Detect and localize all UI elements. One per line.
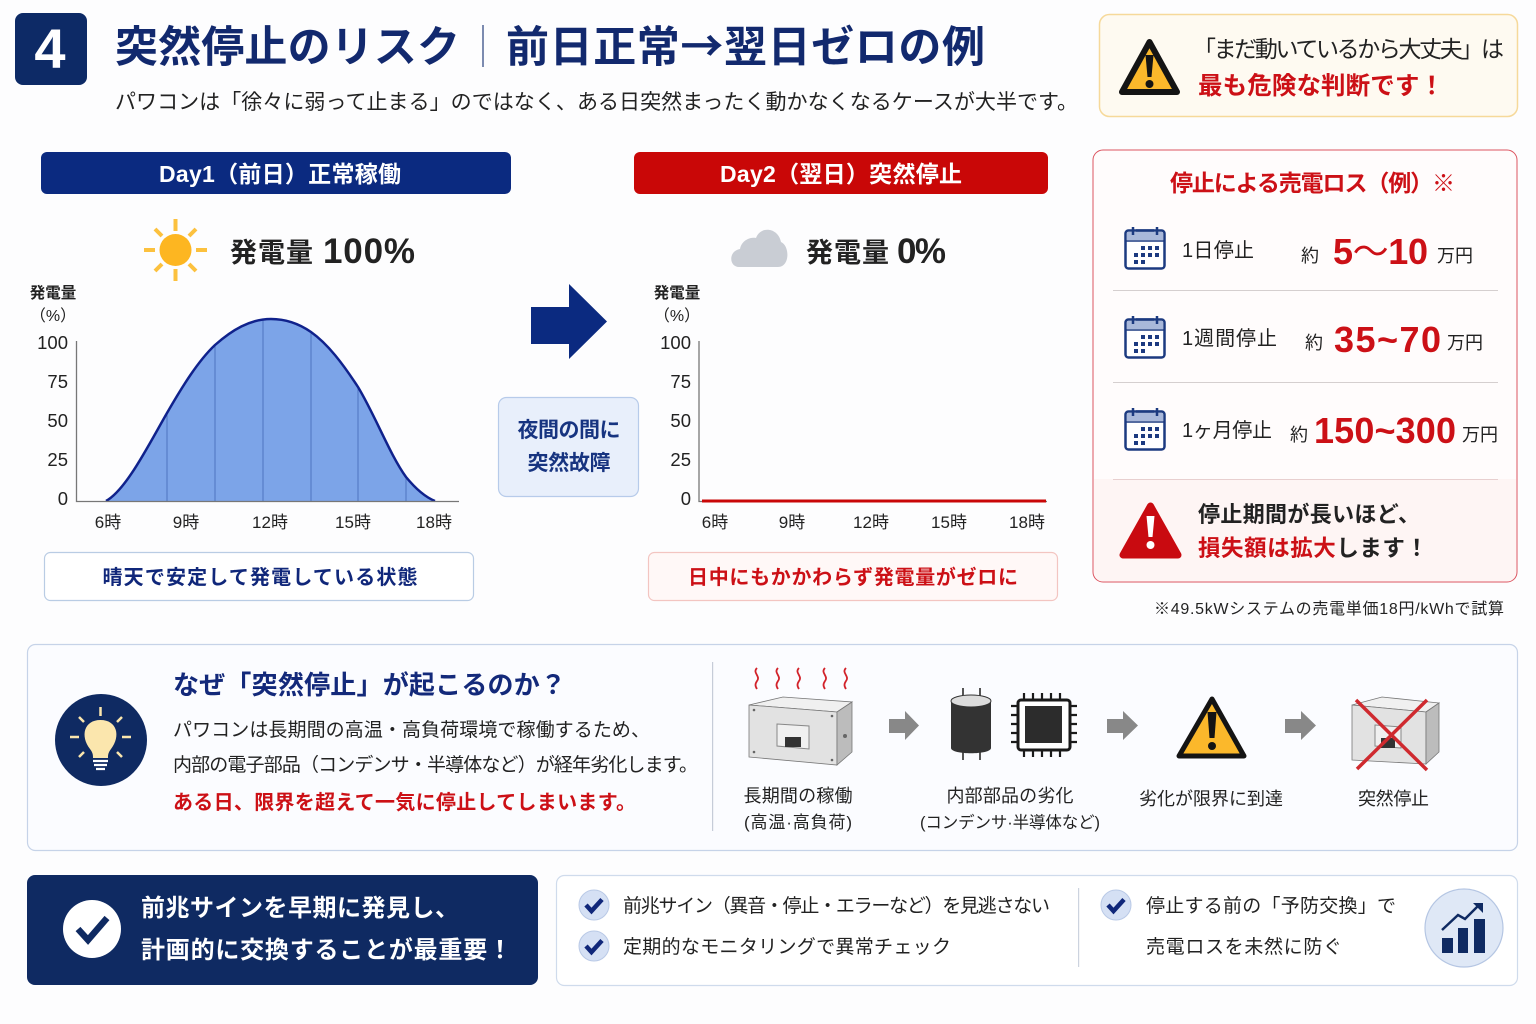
- loss row: 1 month: 万円: [1462, 425, 1498, 445]
- flow step: limit reached: 劣化が限界に到達: [1139, 789, 1283, 809]
- chart: day 1 generation curve: 75: [47, 371, 68, 392]
- callout: warning: 「まだ動いているから大丈夫」は: [1193, 36, 1504, 62]
- arrow: flow 3: [1285, 711, 1316, 740]
- chart: day 2 generation flat line: 100: [660, 332, 691, 353]
- caption: day 1: 晴天で安定して発電している状態: [102, 566, 418, 589]
- chart: day 2 generation flat line: 75: [670, 371, 691, 392]
- chart: day 2 generation flat line: 18時: [1009, 513, 1045, 532]
- chart: day 2 generation flat line: 12時: [853, 513, 889, 532]
- panel: key message: [27, 875, 538, 985]
- loss conclusion text: 停止期間が長いほど、: [1198, 502, 1420, 527]
- action item: preventive replacement: [1101, 890, 1396, 958]
- icon: warning triangle: [1122, 42, 1177, 92]
- flow step: long operation: [744, 668, 852, 832]
- icon: red warning triangle: [1123, 506, 1178, 555]
- chart: day 2 generation flat line: 6時: [702, 513, 728, 532]
- day 1 header: [41, 152, 511, 194]
- loss panel heading: 停止による売電ロス（例）※: [1170, 170, 1455, 196]
- chart: day 1 generation curve: 12時: [252, 513, 288, 532]
- caption: day 1: [44, 552, 474, 600]
- action item: preventive replacement: 売電ロスを未然に防ぐ: [1146, 936, 1342, 958]
- loss row: 1 week: 万円: [1447, 333, 1483, 353]
- chart: day 1 generation curve: 50: [47, 410, 68, 431]
- callout: overnight failure: 夜間の間に: [518, 419, 620, 442]
- callout: warning: 最も危険な判断です！: [1198, 72, 1444, 100]
- loss conclusion text: [1198, 502, 1428, 561]
- panel: actions: [556, 876, 1518, 986]
- loss row: 1 day: 約: [1301, 246, 1319, 266]
- flow step: sudden stop: [1352, 697, 1439, 809]
- loss row: 1 day: 1日停止: [1182, 239, 1254, 262]
- loss row: 1 week: 35~70: [1334, 319, 1441, 360]
- day 2 header: Day2（翌日）突然停止: [720, 161, 962, 187]
- why explanation: パワコンは長期間の高温・高負荷環境で稼働するため、: [173, 719, 650, 741]
- flow step: component degradation: 内部部品の劣化: [946, 786, 1074, 806]
- icon: check circle: [63, 900, 121, 958]
- loss row: 1 month: 150~300: [1314, 410, 1456, 451]
- chart: day 1 generation curve: 15時: [335, 513, 371, 532]
- flow step: sudden stop: 突然停止: [1358, 789, 1429, 809]
- chart: day 2 generation flat line: （%）: [654, 307, 700, 325]
- day 2 output label: [806, 232, 946, 271]
- caption: day 2: [648, 552, 1058, 600]
- chart: day 2 generation flat line: [654, 284, 1047, 532]
- loss row: 1 week: 1週間停止: [1182, 327, 1277, 350]
- panel: power sale loss: [1093, 150, 1517, 582]
- action item: watch signs: 前兆サイン（異音・停止・エラーなど）を見逃さない: [623, 895, 1050, 917]
- title: [115, 13, 985, 75]
- loss row: 1 day: 5～10: [1333, 231, 1428, 272]
- icon: light bulb: [55, 694, 147, 786]
- day 2 output label: 発電量: [806, 238, 889, 268]
- loss row: 1 month: [1126, 408, 1498, 451]
- arrow: flow 2: [1107, 711, 1138, 740]
- callout: overnight failure: [498, 398, 638, 496]
- day 1 output label: [230, 232, 415, 271]
- day 2 output label: 0%: [897, 232, 946, 271]
- icon: cloud: [731, 230, 787, 267]
- loss row: 1 day: 万円: [1437, 246, 1473, 266]
- caption: day 2: 日中にもかかわらず発電量がゼロに: [688, 565, 1018, 589]
- callout: warning: [1100, 14, 1518, 116]
- section number badge: 4: [34, 17, 66, 80]
- why explanation: ある日、限界を超えて一気に停止してしまいます。: [173, 791, 636, 814]
- action item: watch signs: [579, 890, 1050, 920]
- chart: day 1 generation curve: 18時: [416, 513, 452, 532]
- why explanation: 内部の電子部品（コンデンサ・半導体など）が経年劣化します。: [173, 754, 698, 776]
- chart: day 1 generation curve: 0: [58, 488, 68, 509]
- chart: day 2 generation flat line: 9時: [779, 513, 805, 532]
- icon: sun: [144, 219, 207, 281]
- day 2 header: [634, 152, 1048, 194]
- chart: day 2 generation flat line: 0: [681, 488, 691, 509]
- arrow: day 1 to day 2: [531, 284, 607, 359]
- title: 突然停止のリスク: [115, 24, 460, 72]
- chart: day 1 generation curve: 25: [47, 449, 68, 470]
- chart: day 1 generation curve: 9時: [173, 513, 199, 532]
- panel: why sudden stops happen: [28, 644, 1518, 850]
- panel: key message: 計画的に交換することが最重要！: [141, 936, 512, 964]
- subtitle: パワコンは「徐々に弱って止まる」のではなく、ある日突然まったく動かなくなるケースが大半です。: [115, 91, 1078, 114]
- flow step: component degradation: (コンデンサ·半導体など): [920, 812, 1100, 832]
- action item: monitoring: 定期的なモニタリングで異常チェック: [623, 936, 951, 958]
- loss row: 1 week: [1126, 316, 1483, 360]
- day 1 header: Day1（前日）正常稼働: [159, 161, 401, 187]
- panel: key message: 前兆サインを早期に発見し、: [141, 895, 459, 922]
- flow step: long operation: (高温·高負荷): [744, 813, 852, 832]
- action item: preventive replacement: 停止する前の「予防交換」で: [1146, 895, 1396, 917]
- callout: overnight failure: 突然故障: [528, 451, 610, 475]
- chart: day 1 generation curve: [30, 284, 459, 532]
- chart: day 2 generation flat line: 50: [670, 410, 691, 431]
- flow step: long operation: 長期間の稼働: [744, 786, 852, 806]
- loss row: 1 week: 約: [1305, 333, 1323, 353]
- arrow: flow 1: [889, 711, 919, 740]
- loss row: 1 month: 約: [1290, 425, 1308, 445]
- chart: day 2 generation flat line: 25: [670, 449, 691, 470]
- why heading: なぜ「突然停止」が起こるのか？: [173, 670, 566, 700]
- icon: rising chart: [1425, 889, 1503, 967]
- chart: day 2 generation flat line: 発電量: [654, 284, 700, 302]
- action item: monitoring: [579, 931, 951, 961]
- section number badge: [15, 13, 87, 85]
- flow step: component degradation: [920, 688, 1100, 832]
- chart: day 1 generation curve: （%）: [30, 307, 76, 325]
- why explanation: [173, 719, 698, 814]
- day 1 output label: 100%: [323, 232, 415, 271]
- title: 前日正常→翌日ゼロの例: [506, 13, 985, 75]
- chart: day 1 generation curve: 6時: [95, 513, 121, 532]
- loss conclusion text: 損失額は拡大します！: [1198, 536, 1428, 561]
- chart: day 2 generation flat line: 15時: [931, 513, 967, 532]
- loss row: 1 month: 1ヶ月停止: [1182, 419, 1272, 442]
- loss row: 1 day: [1126, 227, 1473, 272]
- footnote: ※49.5kWシステムの売電単価18円/kWhで試算: [1154, 599, 1504, 618]
- day 1 output label: 発電量: [230, 238, 313, 268]
- chart: day 1 generation curve: 発電量: [30, 284, 76, 302]
- chart: day 1 generation curve: 100: [37, 332, 68, 353]
- flow step: limit reached: [1139, 699, 1283, 809]
